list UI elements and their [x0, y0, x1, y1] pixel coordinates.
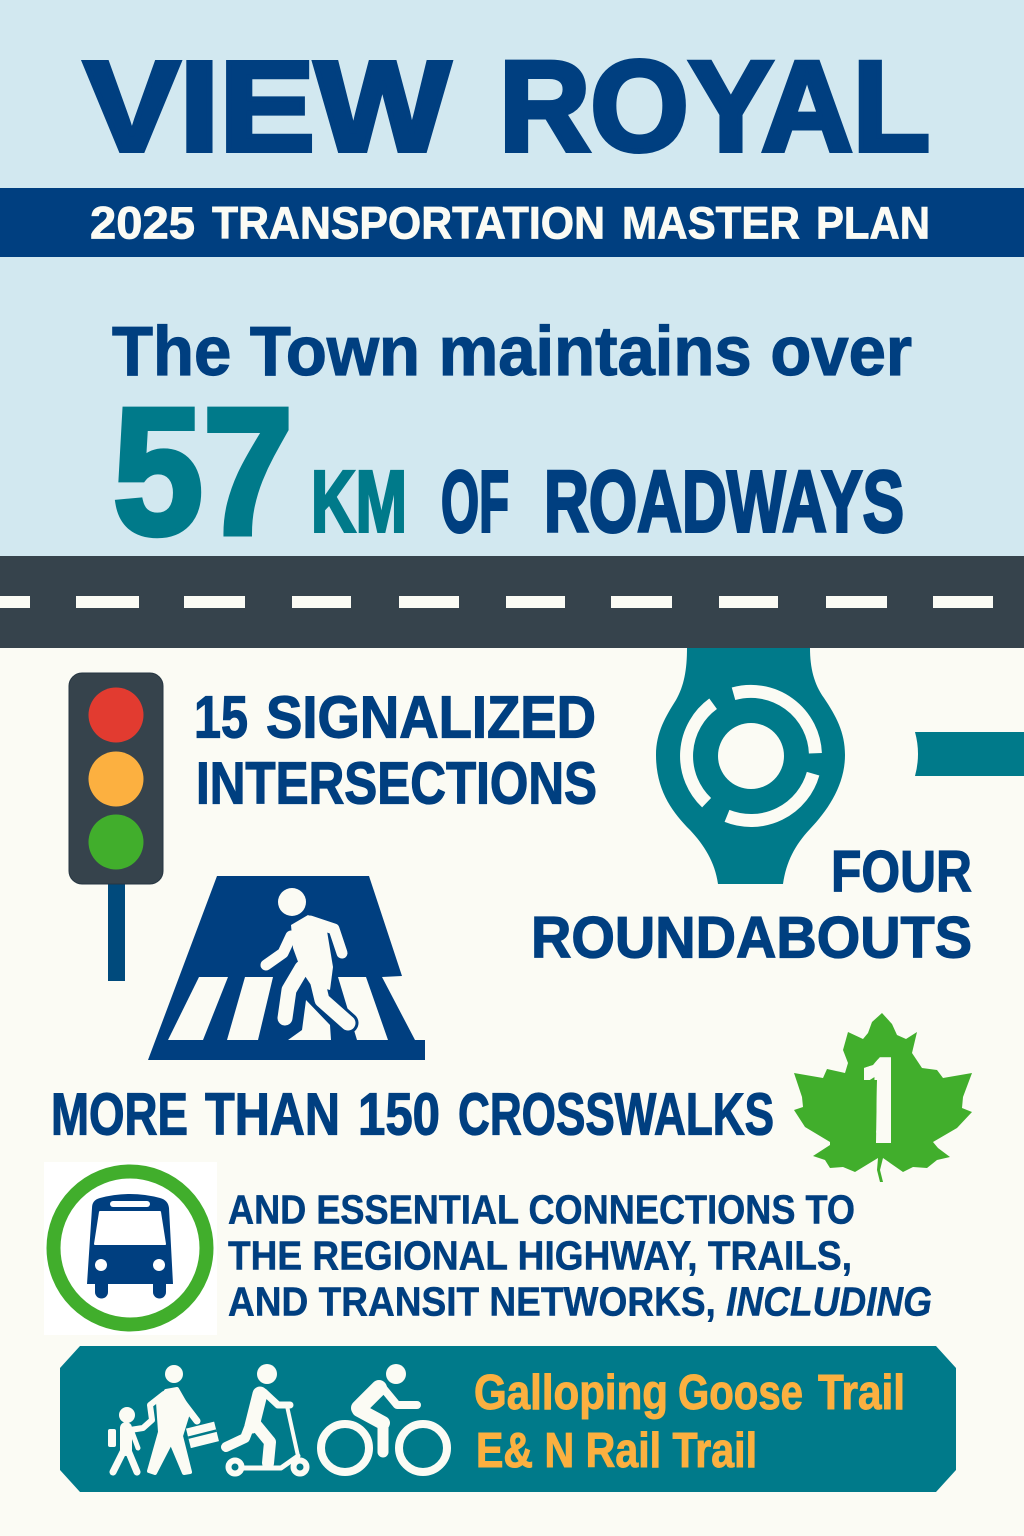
subtitle banner: PLAN: [816, 198, 930, 248]
headline stat: 57 km of roadways: KM: [311, 454, 407, 550]
headline stat: 57 km of roadways: 57: [113, 372, 293, 572]
icon: maple leaf highway 1: [794, 1013, 972, 1182]
headline: The Town maintains over: [112, 312, 912, 390]
text: crosswalks: THAN: [205, 1082, 340, 1148]
text: essential connections: [228, 1186, 932, 1324]
text: four roundabouts: ROUNDABOUTS: [531, 906, 972, 970]
subtitle banner: TRANSPORTATION: [212, 198, 605, 248]
text: crosswalks: MORE: [51, 1082, 188, 1148]
text: signalized intersections: 15: [194, 684, 248, 750]
text: crosswalks: [51, 1082, 774, 1148]
subtitle banner: 2025: [90, 198, 195, 248]
text: crosswalks: CROSSWALKS: [458, 1082, 774, 1148]
text: four roundabouts: FOUR: [831, 840, 972, 904]
text: essential connections: AND ESSENTIAL CONNECTIONS TO: [228, 1186, 855, 1232]
icon: roundabout: [656, 648, 845, 884]
title: ROYAL: [499, 36, 930, 178]
title: [84, 36, 930, 178]
roundabout side road: [915, 732, 1024, 776]
icon: bus stop: [44, 1162, 217, 1335]
text: trail names: E& N Rail Trail: [476, 1424, 757, 1478]
headline stat: 57 km of roadways: [113, 372, 904, 572]
subtitle banner: MASTER: [622, 198, 800, 248]
text: signalized intersections: [194, 684, 597, 816]
text: trail names: [474, 1366, 905, 1478]
text: trail names: Trail: [818, 1366, 905, 1420]
icon: crosswalk with pedestrian: [148, 876, 425, 1060]
road illustration: [0, 556, 1024, 648]
icon: traffic light: [69, 673, 163, 981]
icon: maple leaf highway 1: 1: [848, 1033, 916, 1169]
icon: pedestrians, scooter and cyclist: [110, 1364, 447, 1474]
title: VIEW: [84, 36, 450, 178]
text: trail names: Galloping: [474, 1366, 668, 1420]
text: crosswalks: 150: [358, 1082, 440, 1148]
text: essential connections: AND TRANSIT NETWORKS, INCLUDING: [228, 1278, 932, 1324]
text: signalized intersections: SIGNALIZED: [266, 684, 596, 750]
text: signalized intersections: INTERSECTIONS: [196, 750, 597, 816]
text: essential connections: THE REGIONAL HIGHWAY, TRAILS,: [228, 1232, 852, 1278]
text: four roundabouts: [531, 840, 972, 970]
panel: trails: [60, 1346, 956, 1492]
text: trail names: Goose: [678, 1366, 803, 1420]
headline stat: 57 km of roadways: OF: [441, 454, 509, 550]
subtitle banner: [0, 188, 1024, 257]
